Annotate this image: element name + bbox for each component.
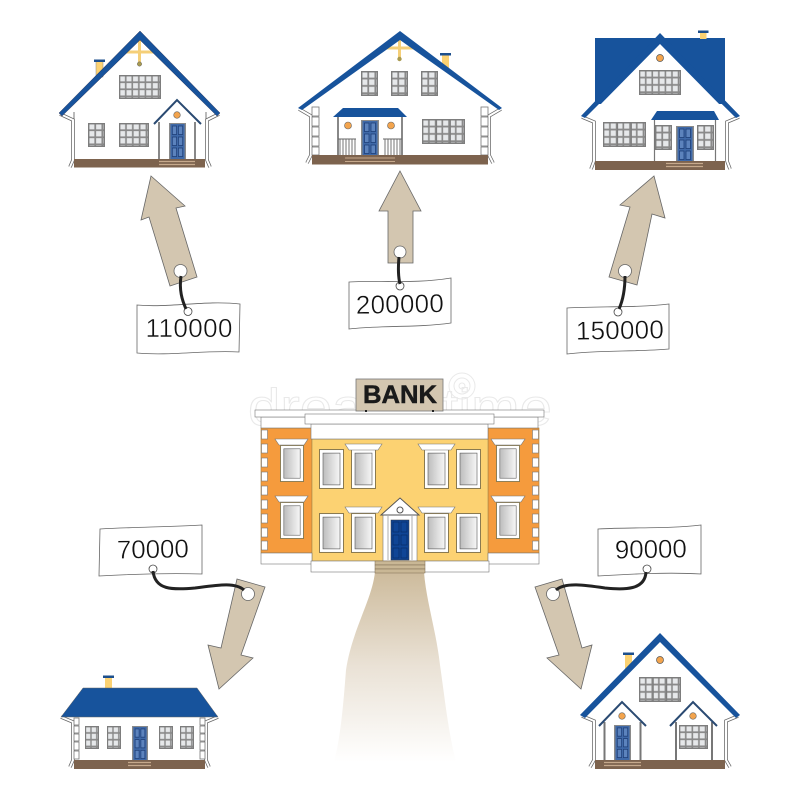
road to bank [334, 572, 456, 762]
arrow tag: 200000: 200000 [356, 288, 444, 320]
arrow tag: 70000 [99, 525, 265, 689]
bank building [255, 410, 544, 573]
watermark: dreamstime [248, 379, 552, 437]
bank entrance [381, 498, 419, 561]
arrow tag: 200000 [349, 171, 451, 329]
house 5: bottom right [580, 633, 740, 769]
arrow tag: 150000 [567, 176, 669, 354]
house 1: top left [59, 31, 220, 168]
bank windows [275, 439, 525, 552]
arrow tag: 110000 [137, 176, 240, 354]
arrow tag: 90000 [535, 525, 701, 689]
bank sign: BANK [363, 381, 437, 409]
arrow tag: 110000: 110000 [146, 313, 232, 343]
arrow tag: 90000: 90000 [615, 533, 687, 565]
bank quoins [262, 430, 538, 550]
house 2: top centre [298, 31, 502, 164]
arrow tag: 70000: 70000 [117, 533, 189, 565]
bank steps [375, 561, 425, 573]
arrow tag: 150000: 150000 [576, 314, 664, 346]
house 3: top right [581, 30, 740, 170]
house 4: bottom left [61, 676, 218, 769]
